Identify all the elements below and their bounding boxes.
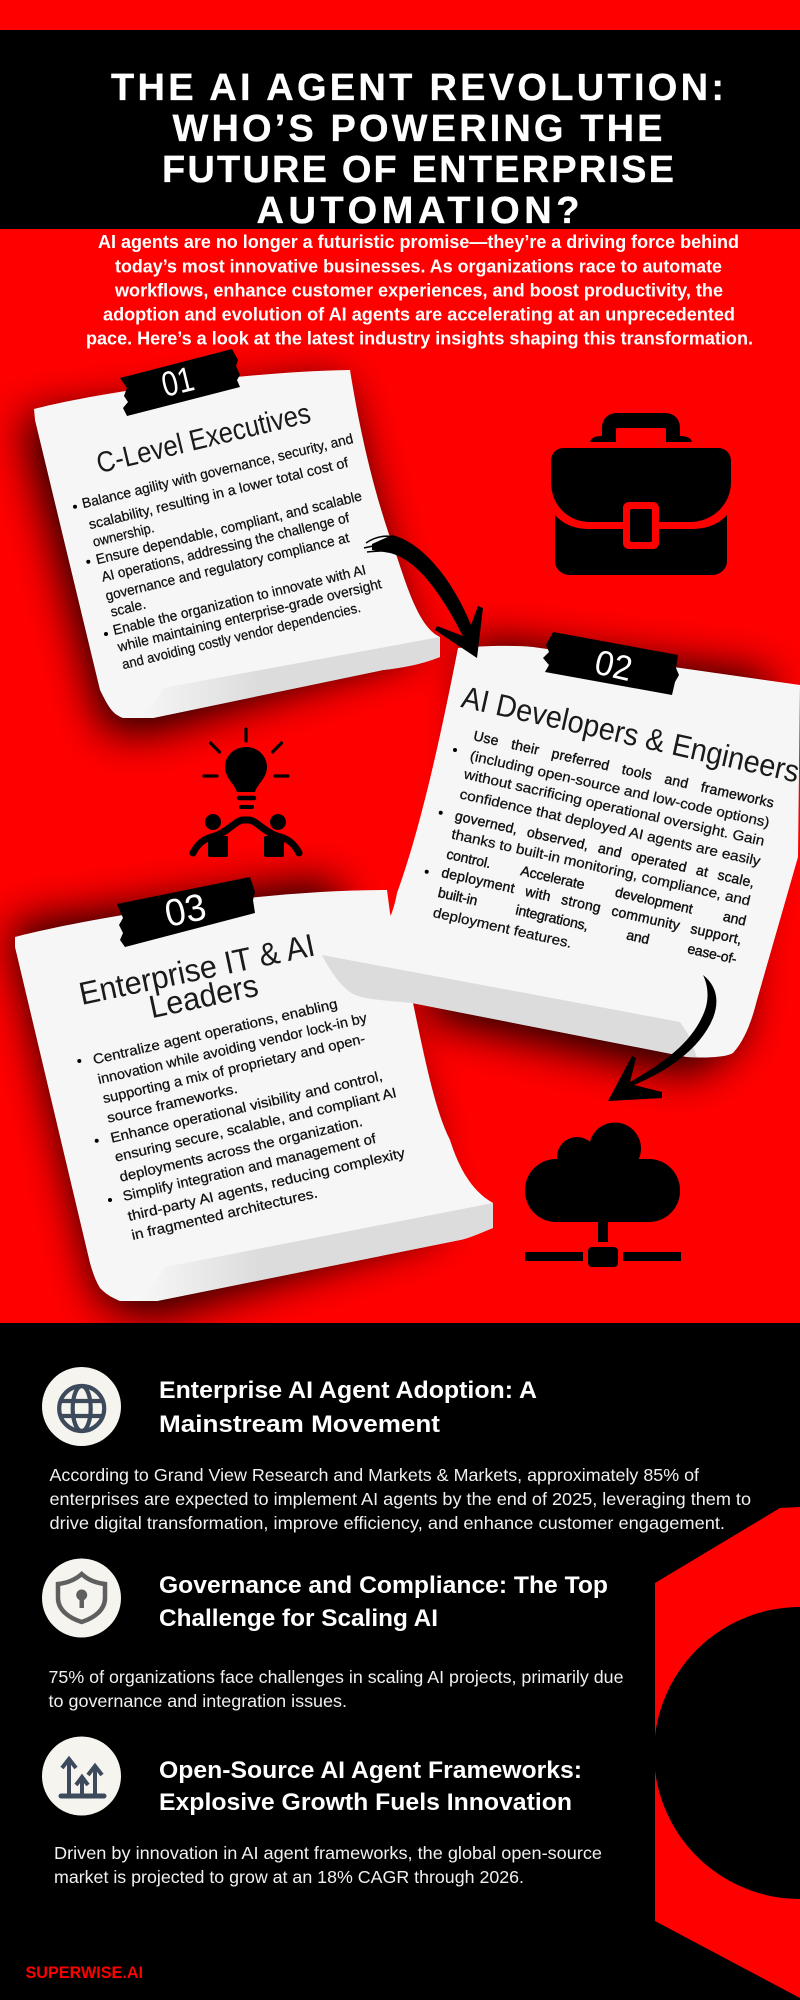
panel: C-Level Executives — [34, 349, 440, 718]
bullet list 2 — [425, 727, 776, 967]
bullet list 1: Balance agility with governance, security, and — [80, 430, 355, 511]
tape 01 — [120, 349, 240, 416]
text: governance body: to governance and integration issues. — [48, 1691, 347, 1711]
bullet list 2: (including open-source and low-code options) — [469, 747, 771, 830]
text: adoption body: According to Grand View Research and Markets & Markets, approximately 85% of — [50, 1465, 699, 1485]
arrow: note 2 to cloud — [608, 975, 716, 1101]
text: adoption body — [50, 1465, 751, 1533]
heading: governance: Governance and Compliance: The Top — [159, 1572, 608, 1599]
text: frameworks body: Driven by innovation in AI agent frameworks, the global open-source — [54, 1843, 602, 1863]
intro paragraph: AI agents are no longer a futuristic promise—they’re a driving force behind — [98, 232, 739, 252]
bullet list 3: source frameworks. — [105, 1080, 239, 1126]
title: WHO’S POWERING THE — [172, 108, 662, 150]
heading: Enterprise IT & AI Leaders: Leaders — [146, 967, 261, 1025]
bullet list 1: Enable the organization to innovate with AI — [111, 561, 367, 638]
bullet list 2: governed, observed, and operated at scale, — [454, 807, 756, 890]
bullet list 1: ownership. — [91, 519, 156, 550]
red background — [0, 0, 800, 1323]
footer brand: SUPERWISE.AI — [26, 1963, 143, 1982]
bullet list 1: governance and regulatory compliance at — [104, 529, 351, 604]
paper sheet 3 — [15, 890, 493, 1301]
bullet list 3: Enhance operational visibility and control, — [109, 1067, 384, 1146]
heading: governance — [159, 1572, 608, 1632]
decoration: red shape with black circle — [654, 1507, 800, 1998]
intro paragraph — [86, 232, 753, 348]
title: FUTURE OF ENTERPRISE — [162, 149, 674, 191]
bullet list 2: control. Accelerate development and — [445, 846, 748, 929]
bullet list 2: built-in integrations, and ease-of- — [437, 884, 739, 967]
icon: growth arrows — [42, 1736, 121, 1816]
bullet list 3: Simplify integration and management of — [121, 1130, 377, 1204]
icon: briefcase — [551, 413, 731, 575]
text: frameworks body — [54, 1843, 602, 1887]
text: governance body — [48, 1667, 624, 1711]
intro paragraph: workflows, enhance customer experiences, and boost productivity, the — [114, 280, 723, 300]
bullet list 3: Centralize agent operations, enabling — [91, 995, 339, 1067]
number 01: 01 — [158, 359, 198, 405]
paper sheet 2 — [322, 646, 800, 1058]
paper shadows — [10, 380, 770, 1318]
heading: adoption: Mainstream Movement — [159, 1411, 440, 1438]
text: frameworks body: market is projected to grow at an 18% CAGR through 2026. — [54, 1867, 524, 1887]
bullet list 2: confidence that deployed AI agents are easily — [458, 786, 762, 869]
panel: AI Developers & Engineers — [322, 632, 800, 1058]
heading: adoption — [159, 1377, 537, 1438]
bullet list 1: AI operations, addressing the challenge of — [100, 509, 351, 585]
text: governance body: 75% of organizations face challenges in scaling AI projects, primarily due — [48, 1667, 624, 1687]
heading: C-Level Executives: C-Level Executives — [93, 398, 314, 480]
bullet list 3 — [77, 995, 406, 1243]
icon: lightbulb and people — [193, 729, 299, 857]
icon: shield — [42, 1558, 121, 1638]
paper fold 2 — [322, 955, 697, 1057]
text: adoption body: enterprises are expected to implement AI agents by the end of 2025, leveraging them to — [50, 1489, 751, 1509]
panel: Enterprise IT & AI Leaders — [15, 877, 493, 1301]
intro paragraph: pace. Here’s a look at the latest industry insights shaping this transformation. — [86, 328, 753, 348]
bullet list 3: deployments across the organization. — [118, 1113, 364, 1185]
bullet list 2: deployment with strong community support, — [440, 864, 744, 947]
bullet list 1: scale. — [109, 596, 147, 620]
paper fold 1 — [126, 637, 440, 718]
bullet list 3: in fragmented architectures. — [130, 1184, 319, 1243]
bullet list 1: Ensure dependable, compliant, and scalable — [94, 487, 364, 567]
text: adoption body: drive digital transformation, improve efficiency, and enhance customer engagement. — [50, 1513, 725, 1533]
tape 03 — [117, 877, 255, 947]
top header band — [0, 30, 800, 229]
title: AUTOMATION? — [256, 190, 580, 232]
icon: cloud network — [525, 1122, 681, 1267]
heading: governance: Challenge for Scaling AI — [159, 1605, 438, 1632]
number 02: 02 — [591, 643, 636, 689]
intro paragraph: adoption and evolution of AI agents are accelerating at an unprecedented — [103, 304, 735, 324]
bullet list 1: and avoiding costly vendor dependencies. — [120, 599, 362, 672]
bullet list 3: ensuring secure, scalable, and compliant AI — [113, 1084, 398, 1165]
bullet list 2: thanks to built-in monitoring, compliance, and — [450, 826, 752, 908]
heading: adoption: Enterprise AI Agent Adoption: A — [159, 1377, 537, 1404]
paper sheet 1 — [34, 370, 440, 718]
heading: frameworks: Explosive Growth Fuels Innovation — [159, 1789, 572, 1816]
bullet list 3: third-party AI agents, reducing complexity — [126, 1144, 406, 1224]
number 03: 03 — [161, 886, 210, 936]
heading: frameworks — [159, 1757, 582, 1816]
paper fold 3 — [122, 1203, 493, 1301]
heading: Enterprise IT & AI Leaders: Enterprise IT & AI — [76, 927, 318, 1012]
title — [111, 67, 724, 232]
bullet list 1 — [73, 430, 383, 672]
tape 02 — [543, 632, 679, 695]
bullet list 3: innovation while avoiding vendor lock-in by — [96, 1009, 368, 1087]
bullet list 1: while maintaining enterprise-grade oversight — [115, 575, 383, 655]
icon: globe — [42, 1367, 121, 1446]
bullet list 1: scalability, resulting in a lower total cost of — [87, 454, 350, 532]
bottom section background — [0, 1323, 800, 2000]
bullet list 2: without sacrificing operational oversight. Gain — [462, 765, 766, 849]
intro paragraph: today’s most innovative businesses. As organizations race to automate — [115, 256, 722, 276]
arrow: note 1 to note 2 — [364, 535, 483, 658]
bullet list 2: Use their preferred tools and frameworks — [472, 727, 776, 811]
heading: frameworks: Open-Source AI Agent Frameworks: — [159, 1757, 582, 1784]
title: THE AI AGENT REVOLUTION: — [111, 67, 724, 109]
bullet list 3: supporting a mix of proprietary and open- — [101, 1030, 367, 1106]
bullet list 2: deployment features. — [432, 904, 573, 951]
